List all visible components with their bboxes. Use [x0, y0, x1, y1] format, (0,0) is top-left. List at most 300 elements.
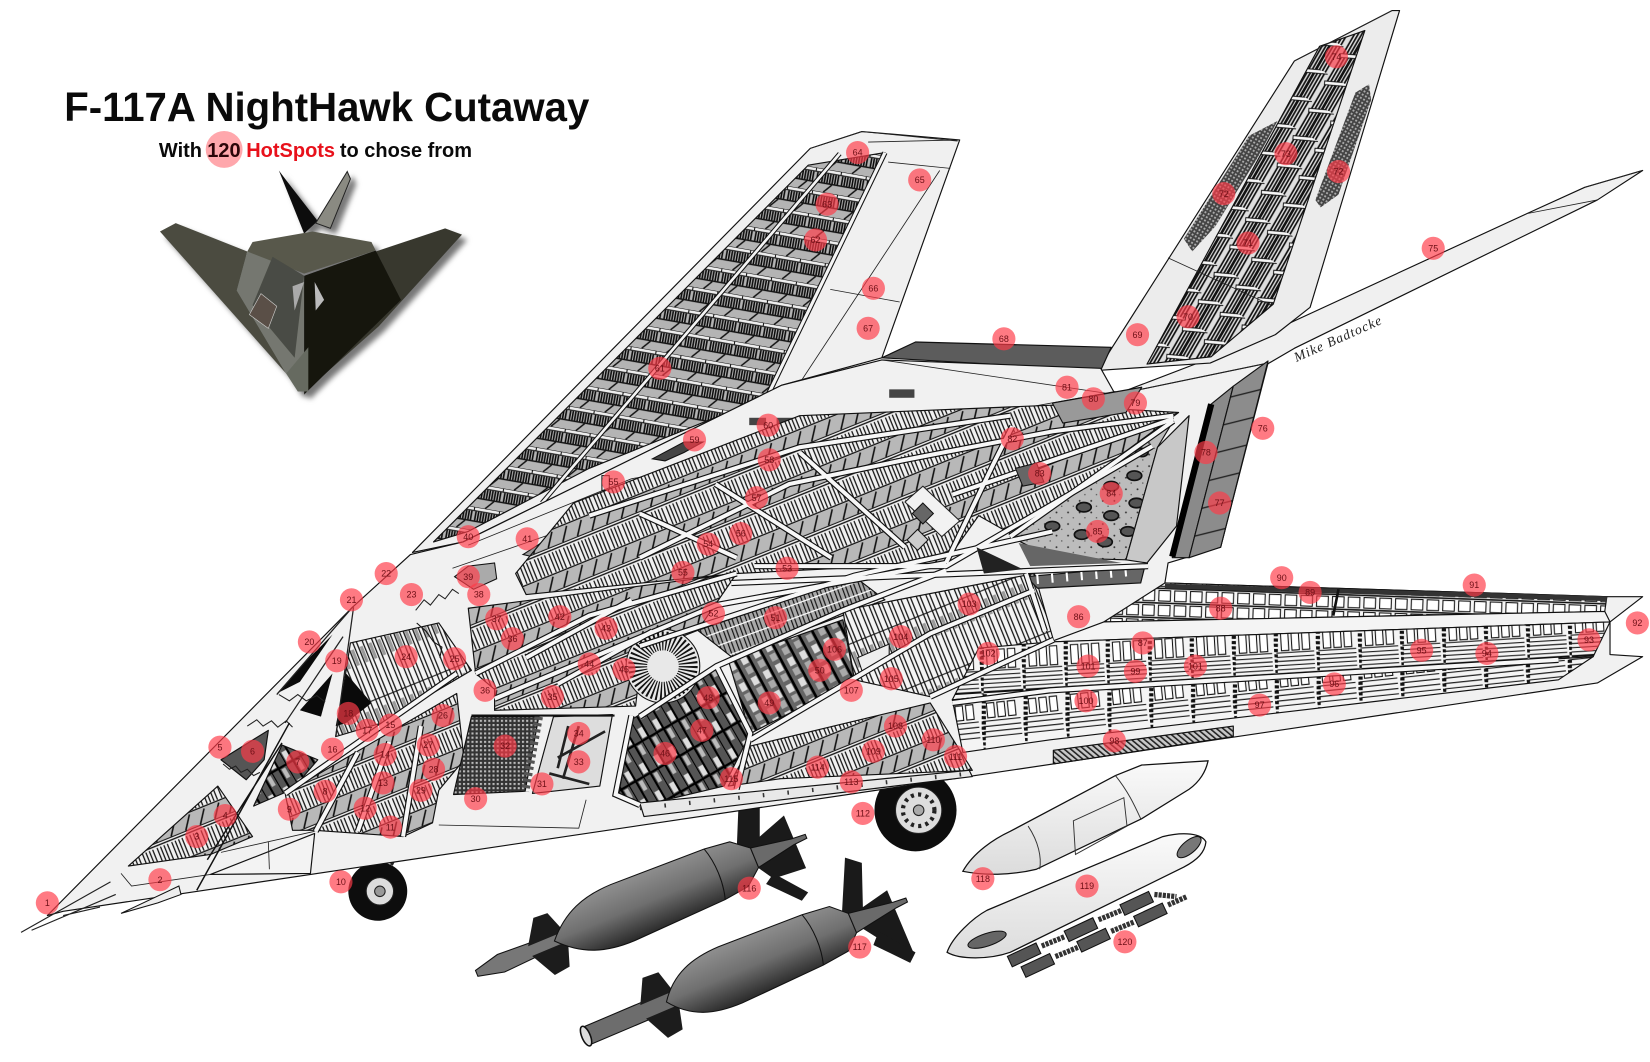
hotspot 48: [697, 686, 720, 709]
hotspot 37: [485, 607, 508, 630]
hotspot 1: 1: [45, 898, 50, 908]
longerons: [285, 416, 1558, 837]
hotspot 23: [400, 583, 423, 606]
right wing and fuselage skin: [47, 360, 1643, 916]
photo: F-117 head-on view: [160, 170, 462, 395]
thin rear fin: [1115, 170, 1643, 400]
hotspot 103: [958, 592, 981, 616]
hotspot 49: [758, 691, 781, 715]
hotspot 78: 78: [1201, 448, 1211, 458]
hotspot 25: 25: [450, 654, 460, 664]
hotspot 82: 82: [1007, 434, 1017, 444]
hotspot 8: [314, 780, 337, 803]
hotspot 79: [1124, 391, 1147, 415]
hotspot 103: 103: [962, 599, 977, 609]
hotspot 31: 31: [537, 779, 547, 789]
hotspot 86: [1067, 605, 1090, 628]
hotspot 67: 67: [863, 323, 873, 333]
hotspot 40: [457, 525, 480, 548]
wing internal structure: [434, 153, 885, 542]
hotspot 101 right: [1184, 655, 1207, 678]
hotspot 64: [846, 141, 869, 164]
hotspot 18: 18: [343, 709, 353, 719]
hotspot 46: [653, 742, 677, 765]
hotspot 111: [944, 745, 967, 768]
hotspot 73: [1274, 142, 1297, 165]
hotspot 21: 21: [346, 595, 356, 605]
hotspot 71: 71: [1243, 238, 1253, 248]
hotspot 107: [840, 679, 863, 702]
hotspot 116: [738, 877, 761, 900]
hotspot 81: 81: [1062, 382, 1072, 392]
hotspot 36: [474, 679, 497, 702]
hotspot 20: 20: [304, 637, 314, 647]
hotspot 75: [1422, 237, 1445, 260]
hotspot 88: 88: [1216, 603, 1226, 613]
hotspot 15: 15: [385, 720, 395, 730]
hotspot 32: 32: [500, 741, 510, 751]
hotspot 17: [356, 719, 379, 742]
hotspot 60: 60: [763, 420, 773, 430]
zigzag cut lines in nose: [223, 589, 459, 776]
submunitions 120: [1007, 891, 1187, 977]
hotspot 101 left: 101: [1081, 661, 1096, 671]
hotspot 89: [1299, 581, 1322, 604]
hotspot 50: [808, 659, 831, 682]
hotspot 6: [241, 740, 264, 763]
bomb 116: [465, 800, 818, 1003]
hotspot 17: 17: [362, 725, 372, 735]
hotspot 99: 99: [1130, 667, 1140, 677]
hotspot 54: [697, 532, 720, 556]
subtitle with hotspot count: With: [159, 140, 202, 162]
hotspot 83: [1028, 462, 1051, 485]
hotspot 90: [1270, 566, 1293, 589]
windows bay: [254, 745, 318, 806]
hotspot 62: [804, 228, 827, 252]
hotspot 36: 36: [480, 685, 490, 695]
hotspot 100: [1074, 689, 1098, 712]
nose probes: [21, 882, 181, 932]
hotspot 107: 107: [844, 685, 859, 695]
main wheel: [874, 769, 957, 851]
hotspot 27: 27: [423, 740, 433, 750]
hotspot 117: [848, 936, 871, 959]
hotspot 13: [371, 771, 395, 794]
hotspot 92: [1626, 611, 1649, 635]
hotspot 36 upper: 36: [507, 634, 517, 644]
hotspot 58: 58: [764, 455, 774, 465]
hotspot 114: [806, 756, 829, 779]
hotspot 47: 47: [697, 725, 707, 735]
hotspot 114: 114: [811, 762, 825, 772]
hotspot 45: [612, 658, 636, 681]
hotspot 8: 8: [323, 786, 328, 796]
hotspot 101 left: [1076, 655, 1100, 678]
hotspot 30: 30: [471, 794, 481, 804]
hotspot 105: [880, 667, 903, 690]
hotspot 61: 61: [655, 363, 665, 373]
hotspot 112: [851, 802, 874, 825]
hotspot 59: [683, 428, 706, 451]
engine fan section: [698, 577, 885, 657]
hotspot 22: 22: [381, 569, 391, 579]
hotspot 90: 90: [1277, 573, 1287, 583]
wing spar: [1050, 611, 1610, 642]
hotspot 104: [889, 625, 912, 648]
dispenser pod 119: [947, 833, 1206, 958]
fuel pod 118: [963, 761, 1208, 874]
cockpit bay: [277, 607, 471, 737]
hotspot 109: [862, 740, 885, 763]
forward lower lattice: [285, 693, 464, 837]
fuselage bay 46-48: [619, 666, 750, 806]
hotspot 26: 26: [438, 711, 448, 721]
mid fuselage ribs: [843, 574, 1053, 697]
hotspot 40: 40: [463, 532, 473, 542]
hotspot 25: [443, 647, 466, 670]
hotspot 44: [578, 652, 601, 676]
hotspot 72 right: [1327, 160, 1350, 183]
subtitle with hotspot count: 120: [207, 140, 241, 162]
hotspot 11: [379, 816, 402, 839]
hotspot 5: [208, 736, 232, 759]
hotspot 80: 80: [1088, 394, 1098, 404]
upper fuselage panels: [452, 360, 1268, 589]
title: F-117A NightHawk Cutaway: [64, 84, 590, 130]
hotspot 29: [409, 779, 432, 802]
hotspot 37: 37: [492, 614, 502, 624]
hotspot 93: [1577, 628, 1601, 651]
hotspot 76: 76: [1258, 423, 1268, 433]
hotspot 56: 56: [736, 529, 746, 539]
hotspot 56: [729, 522, 752, 545]
hotspot 31: [530, 772, 554, 796]
hotspot 35: 35: [547, 692, 557, 702]
hotspot 57: 57: [752, 493, 762, 503]
riveted skin plate: [1010, 421, 1173, 566]
hotspot 15: [379, 713, 402, 737]
hotspot 9: 9: [287, 804, 292, 814]
subtitle with hotspot count: to chose from: [340, 140, 472, 162]
hotspot 55 lower: [671, 561, 695, 584]
hotspot 11: 11: [386, 822, 395, 832]
hotspot 4: 4: [223, 811, 228, 821]
fan face: [626, 629, 700, 703]
hotspot 110: 110: [926, 735, 941, 745]
hotspot 81: [1055, 376, 1079, 399]
hotspot 7: 7: [295, 757, 300, 767]
hotspot 85: [1086, 520, 1109, 543]
hotspot 52: [702, 602, 725, 625]
hotspot 83: 83: [1035, 469, 1045, 479]
gear door strip: [640, 770, 972, 817]
hotspot 2: [148, 868, 172, 891]
ejection seat bay: [221, 730, 268, 780]
hotspot 63: [816, 193, 839, 216]
hotspot 104: 104: [893, 632, 908, 642]
hotspot 92: 92: [1632, 618, 1642, 628]
hotspot 101 right: 101: [1188, 661, 1203, 671]
hotspot 71: [1236, 232, 1260, 255]
nose lattice: [128, 786, 253, 866]
hotspot 51: [764, 606, 787, 629]
hotspot 68: [992, 327, 1015, 350]
hotspot 28: 28: [429, 764, 439, 774]
nose wheel and gear: [348, 837, 407, 921]
hotspot 42: 42: [555, 612, 565, 622]
hotspot 30: [464, 787, 487, 810]
hotspot 44: 44: [584, 659, 594, 669]
hotspot 14: 14: [380, 750, 390, 760]
hotspot 116: 116: [742, 883, 756, 893]
hotspot 77: [1208, 491, 1231, 515]
lower mid lattice: [728, 703, 972, 786]
hotspot 94: 94: [1482, 649, 1492, 659]
hotspot 53: [776, 557, 799, 580]
nozzle side strip: [1126, 416, 1189, 563]
hotspot 16: 16: [328, 744, 338, 754]
hotspot 10: 10: [336, 877, 346, 887]
hotspot 82: [1001, 427, 1024, 450]
hotspot 100: 100: [1079, 696, 1093, 706]
hotspot 20: [298, 630, 321, 653]
hotspot 65: 65: [915, 175, 925, 185]
hotspot 18: [337, 702, 360, 725]
hotspot 2: 2: [157, 875, 162, 885]
hotspot 118: [971, 867, 994, 890]
hotspot 63: 63: [822, 199, 832, 209]
bomb 117: [570, 858, 920, 1062]
hotspot 120: [1113, 930, 1136, 953]
hotspot 115: 115: [724, 774, 738, 784]
hotspot 53: 53: [782, 563, 792, 573]
hotspot 72 left: [1212, 182, 1235, 205]
hotspot 24: 24: [401, 652, 411, 662]
hotspot 38: 38: [474, 590, 484, 600]
hotspot 41: [516, 527, 539, 550]
dark duct band: [1026, 566, 1145, 588]
nose strakes: [197, 723, 289, 890]
hotspot 27: [417, 733, 440, 757]
access panel: [858, 644, 889, 673]
hotspot 68: 68: [999, 334, 1009, 344]
subtitle with hotspot count: HotSpots: [246, 140, 335, 162]
hotspot 87: 87: [1138, 638, 1148, 648]
hotspot 69: [1126, 323, 1149, 346]
hotspot 97: 97: [1255, 700, 1265, 710]
hotspot 76: [1251, 417, 1274, 440]
hotspot 54: 54: [703, 539, 713, 549]
mesh bay 32: [454, 717, 539, 794]
hotspot 84: [1100, 482, 1123, 505]
hotspot 115: [720, 767, 743, 790]
hotspot 88: [1209, 597, 1232, 620]
hotspot 29: 29: [416, 785, 426, 795]
hotspot 75: 75: [1428, 244, 1438, 254]
hotspot 46: 46: [660, 749, 670, 759]
upper wing row: [1104, 583, 1607, 622]
trailing hatch: [1053, 726, 1233, 764]
subtitle with hotspot count: [159, 131, 472, 168]
hotspot 33: [567, 750, 590, 773]
hotspot 72 right: 72: [1334, 167, 1344, 177]
hotspot 43: 43: [601, 623, 611, 633]
hotspot 78: [1194, 441, 1218, 464]
hotspot 85: 85: [1093, 527, 1103, 537]
hotspot 118: 118: [976, 874, 990, 884]
hotspot 48: 48: [703, 693, 713, 703]
hotspot 74: 74: [1331, 52, 1341, 62]
hotspot 55: 55: [609, 477, 618, 487]
hotspot 73: 73: [1281, 149, 1291, 159]
signature: Mike Badtocke: [1291, 312, 1385, 365]
hotspot 39: [457, 565, 480, 588]
engine compressor section: [728, 620, 854, 733]
hotspot 117: 117: [853, 942, 867, 952]
hotspot 95: 95: [1417, 645, 1427, 655]
hotspot 19: [325, 649, 348, 672]
hotspot 93: 93: [1584, 635, 1594, 645]
bay 33 and 34: [439, 715, 615, 828]
hotspot 7: [286, 750, 309, 773]
hotspot 24: [395, 645, 418, 668]
hotspot 5: 5: [217, 742, 222, 752]
hotspot 35: [541, 685, 564, 708]
wing forward row: [952, 622, 1610, 700]
hotspot 72 left: 72: [1219, 189, 1229, 199]
hotspot 69: 69: [1133, 330, 1143, 340]
hotspot 89: 89: [1305, 588, 1315, 598]
hotspot 66: [862, 277, 885, 300]
hotspot 43: [595, 617, 618, 640]
forward fuselage lattice: [468, 574, 737, 710]
hotspot 55: [602, 470, 625, 494]
hotspot 33: 33: [574, 757, 584, 767]
hotspot 55 lower: 55: [678, 568, 688, 578]
hotspot 106: 106: [827, 644, 842, 654]
hotspot 67: [857, 317, 880, 340]
hotspot 41: 41: [522, 534, 532, 544]
hotspot 19: 19: [332, 656, 342, 666]
hotspot 110: [922, 728, 945, 751]
hotspot 98: 98: [1109, 736, 1119, 746]
hotspot 108: [884, 715, 907, 738]
hotspot 28: [422, 758, 445, 781]
hotspot 6: 6: [250, 747, 255, 757]
hotspot 86: 86: [1074, 612, 1084, 622]
hotspot 99: [1124, 660, 1147, 683]
hotspot 96: [1323, 672, 1346, 696]
hotspot 42: [548, 605, 571, 628]
upper bay lattice: [516, 405, 1179, 595]
hotspot 10: [329, 870, 353, 893]
hotspot 60: [757, 414, 780, 437]
hotspot 13: 13: [378, 778, 388, 788]
hotspot 36 upper: [501, 627, 524, 650]
hotspot 65: [908, 168, 931, 192]
hotspot 111: 111: [949, 752, 962, 762]
hotspot 23: 23: [406, 590, 416, 600]
hotspot 62: 62: [811, 235, 821, 245]
hotspot 95: [1410, 639, 1433, 662]
hotspot 109: 109: [866, 747, 881, 757]
hotspot 58: [758, 448, 781, 471]
lower nose equipment block: [121, 831, 315, 886]
nozzle gray band: [1172, 386, 1233, 558]
hotspot 9: [278, 798, 301, 821]
hotspot 34: 34: [574, 729, 584, 739]
hotspot 34: [567, 722, 590, 745]
hotspot 47: [690, 719, 713, 742]
fin internal structure: [1147, 31, 1365, 364]
hotspot 12: 12: [360, 803, 370, 813]
hotspot 105: 105: [884, 674, 899, 684]
hotspot 120: 120: [1117, 937, 1132, 947]
hotspot 106: [823, 638, 846, 661]
hotspot 45: 45: [619, 664, 629, 674]
hotspot 52: 52: [708, 609, 718, 619]
hotspot 108: 108: [888, 721, 903, 731]
fin hatched panels: [1184, 121, 1277, 252]
hotspot 3: [185, 825, 208, 848]
hotspot 12: [354, 797, 377, 820]
hotspot 74: [1325, 45, 1348, 68]
hotspot 51: 51: [771, 613, 781, 623]
hotspot 113: 113: [844, 777, 858, 787]
hotspot 102: 102: [981, 649, 996, 659]
hotspot 98: [1103, 729, 1126, 752]
hotspot 39: 39: [463, 572, 473, 582]
hotspot 70: 70: [1183, 312, 1193, 322]
hotspot 1: [36, 891, 59, 914]
hotspot 38: [467, 583, 490, 606]
hotspot 16: [321, 738, 344, 761]
hotspot 94: [1475, 642, 1498, 665]
hotspot 91: [1463, 574, 1486, 597]
hotspot 61: [648, 357, 671, 380]
hotspot 14: [374, 743, 397, 766]
hotspot 59: 59: [690, 435, 700, 445]
hotspot 119: 119: [1080, 881, 1094, 891]
wing rear row: [952, 657, 1593, 752]
hotspot 119: [1075, 874, 1099, 898]
hotspot 22: [375, 562, 398, 585]
hotspot 91: 91: [1469, 580, 1479, 590]
hotspot 49: 49: [764, 698, 774, 708]
hotspot 66: 66: [868, 283, 878, 293]
hotspot 57: [745, 486, 768, 509]
hotspot 113: [840, 770, 863, 793]
hotspot 84: 84: [1106, 489, 1116, 499]
hotspot 32: [494, 735, 517, 758]
hotspot 3: 3: [194, 832, 199, 842]
hotspot 26: [431, 704, 455, 727]
diamonds and rivet strip: [905, 463, 1044, 574]
hotspot 77: 77: [1215, 498, 1225, 508]
hotspot 80: [1082, 387, 1105, 410]
hotspot 64: 64: [853, 148, 863, 158]
hotspot 96: 96: [1329, 679, 1339, 689]
hotspot 112: 112: [856, 809, 870, 819]
hotspot 79: 79: [1130, 398, 1140, 408]
nozzle shutter: [1189, 361, 1268, 558]
tall rear fin: [1098, 11, 1400, 370]
hotspot 97: [1248, 693, 1271, 717]
hotspot 4: [214, 804, 237, 827]
hotspot 87: [1131, 631, 1154, 655]
hotspot 70: [1176, 305, 1200, 328]
